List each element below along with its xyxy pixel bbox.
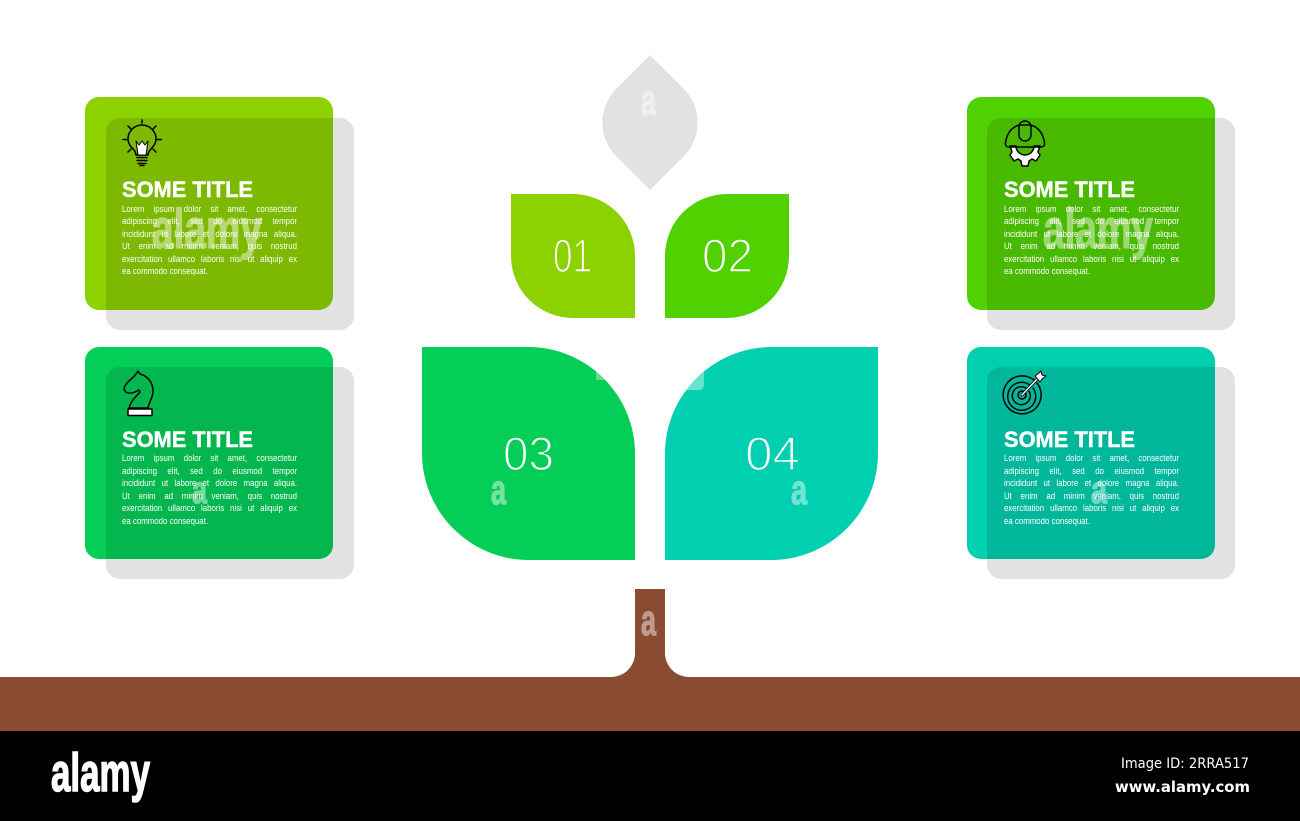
icon: light bulb <box>123 120 162 166</box>
card 3 offset shadow <box>106 367 354 579</box>
watermarks over artwork: a <box>491 466 506 513</box>
number 02: 02 <box>702 229 753 282</box>
card 4 body text: incididunt ut labore et dolore magna aliqua. <box>1004 478 1179 488</box>
card 1 background <box>85 97 333 310</box>
card 4 title: SOME TITLE <box>1004 427 1135 452</box>
tree trunk and ground <box>0 589 1300 731</box>
card 2 background <box>967 97 1215 310</box>
icon: chess knight <box>124 371 153 416</box>
card 1 title: SOME TITLE <box>122 177 253 202</box>
number 01: 01 <box>553 229 592 282</box>
card 2 title: SOME TITLE <box>1004 177 1135 202</box>
number 03: 03 <box>503 427 554 480</box>
card 2 body text: Lorem ipsum dolor sit amet, consectetur <box>1004 204 1179 214</box>
card 3 body text: incididunt ut labore et dolore magna aliqua. <box>122 478 297 488</box>
footer bar <box>0 731 1300 821</box>
card 2 body text: incididunt ut labore et dolore magna aliqua. <box>1004 228 1179 238</box>
leaf 01 <box>511 194 635 318</box>
leaf 03 <box>422 347 635 560</box>
card 1 body text: ea commodo consequat. <box>122 266 208 276</box>
card 2 body text: Ut enim ad minim veniam, quis nostrud <box>1004 241 1179 251</box>
panel: card 1 <box>85 97 354 330</box>
card 3 body text <box>122 452 322 530</box>
card 3 body text: ea commodo consequat. <box>122 516 208 526</box>
card 3 body text: adipiscing elit, sed do eiusmod tempor <box>122 466 297 476</box>
watermarks over artwork: a <box>791 466 807 513</box>
card 2 body text: ea commodo consequat. <box>1004 266 1090 276</box>
card 2 body text: exercitation ullamco laboris nisi ut aliquip ex <box>1004 254 1179 264</box>
card 3 background <box>85 347 333 559</box>
card 1 body text: exercitation ullamco laboris nisi ut aliquip ex <box>122 254 297 264</box>
number 04: 04 <box>745 427 800 480</box>
card 4 body text: ea commodo consequat. <box>1004 516 1090 526</box>
leaf 04 <box>665 347 878 560</box>
leaf 02 <box>665 194 789 318</box>
watermarks over artwork: alamy <box>152 197 262 260</box>
watermarks over artwork: a <box>641 76 656 125</box>
card 3 body text: Lorem ipsum dolor sit amet, consectetur <box>122 453 297 463</box>
card 3 body text: Ut enim ad minim veniam, quis nostrud <box>122 490 297 500</box>
image id: Image ID: 2RRA517 <box>1121 756 1249 772</box>
card 1 body text <box>122 202 322 280</box>
card 4 body text: Lorem ipsum dolor sit amet, consectetur <box>1004 453 1179 463</box>
website: www.alamy.com <box>1115 778 1250 796</box>
card 1 body text: adipiscing elit, sed do eiusmod tempor <box>122 216 297 226</box>
card 1 body text: Ut enim ad minim veniam, quis nostrud <box>122 241 297 251</box>
card 4 body text: exercitation ullamco laboris nisi ut aliquip ex <box>1004 503 1179 513</box>
watermarks over artwork: a <box>192 470 208 512</box>
card 3 title: SOME TITLE <box>122 427 253 452</box>
watermarks over artwork: a <box>1091 470 1108 512</box>
panel: card 4 <box>967 347 1235 579</box>
card 4 body text <box>1004 452 1204 530</box>
card 2 body text <box>1004 202 1204 280</box>
card 4 background <box>967 347 1215 559</box>
card 4 body text: adipiscing elit, sed do eiusmod tempor <box>1004 466 1179 476</box>
card 4 offset shadow <box>987 367 1235 579</box>
card 1 body text: incididunt ut labore et dolore magna aliqua. <box>122 228 297 238</box>
grey top bud leaf <box>602 55 698 190</box>
card 4 body text: Ut enim ad minim veniam, quis nostrud <box>1004 490 1179 500</box>
watermarks over artwork: a <box>641 596 656 645</box>
footer logo: alamy <box>51 743 150 803</box>
card 3 body text: exercitation ullamco laboris nisi ut aliquip ex <box>122 503 297 513</box>
icon: target with dart <box>1003 371 1046 414</box>
icon: hard hat with gear <box>1005 121 1045 166</box>
card 2 offset shadow <box>987 118 1235 330</box>
panel: card 3 <box>85 347 354 579</box>
watermarks over artwork <box>152 76 1153 645</box>
card 1 offset shadow <box>106 118 354 330</box>
card 2 body text: adipiscing elit, sed do eiusmod tempor <box>1004 216 1179 226</box>
watermarks over artwork: alamy <box>1043 197 1153 260</box>
panel: card 2 <box>967 97 1235 330</box>
card 1 body text: Lorem ipsum dolor sit amet, consectetur <box>122 204 297 214</box>
